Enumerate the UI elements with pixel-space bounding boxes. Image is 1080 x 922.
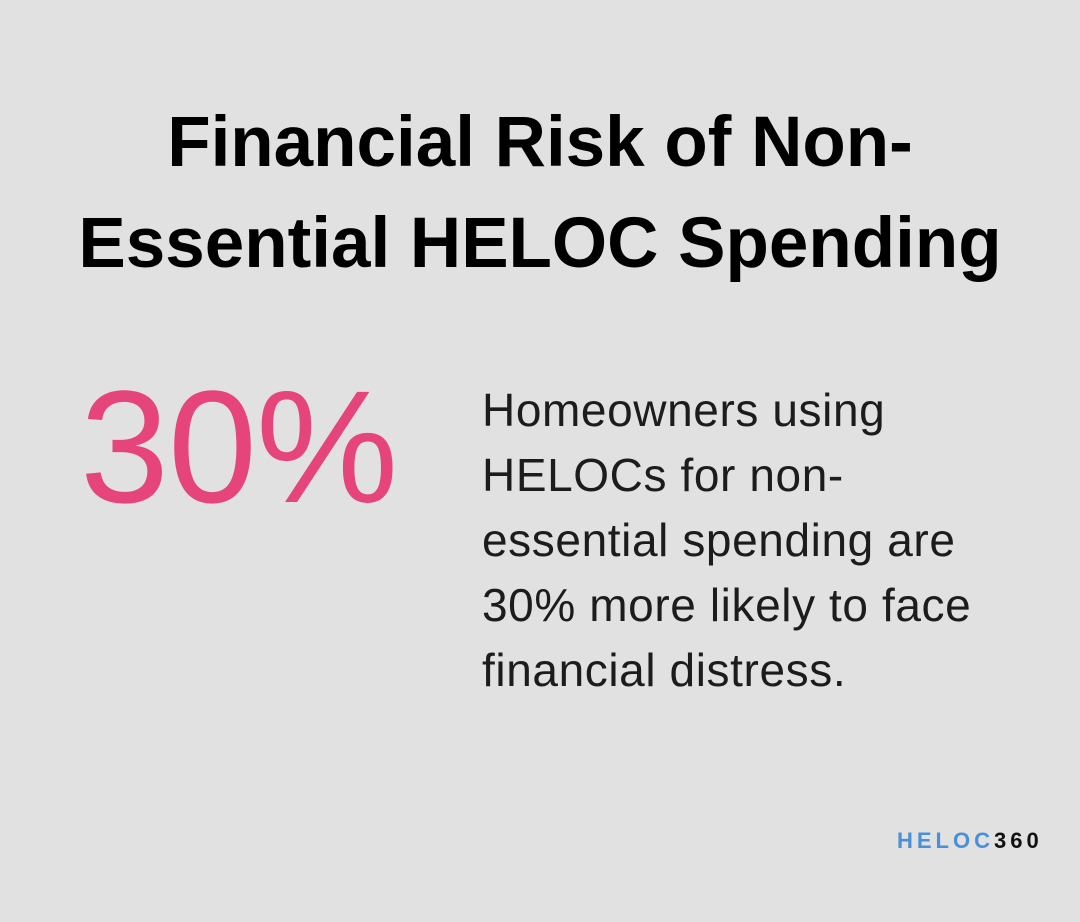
logo: HELOC360: HELOC360	[897, 828, 1043, 853]
text block: description: 30% more likely to face	[482, 579, 971, 631]
title: Financial Risk of Non-	[167, 103, 913, 182]
title	[78, 103, 1002, 283]
text block: description: Homeowners using	[482, 384, 885, 436]
title: Essential HELOC Spending	[78, 204, 1002, 283]
stat: 30%: 30%	[80, 357, 397, 536]
text block: description: financial distress.	[482, 644, 846, 696]
text block: description: HELOCs for non-	[482, 449, 844, 501]
text block: description: essential spending are	[482, 514, 956, 566]
text block: description	[482, 384, 971, 696]
